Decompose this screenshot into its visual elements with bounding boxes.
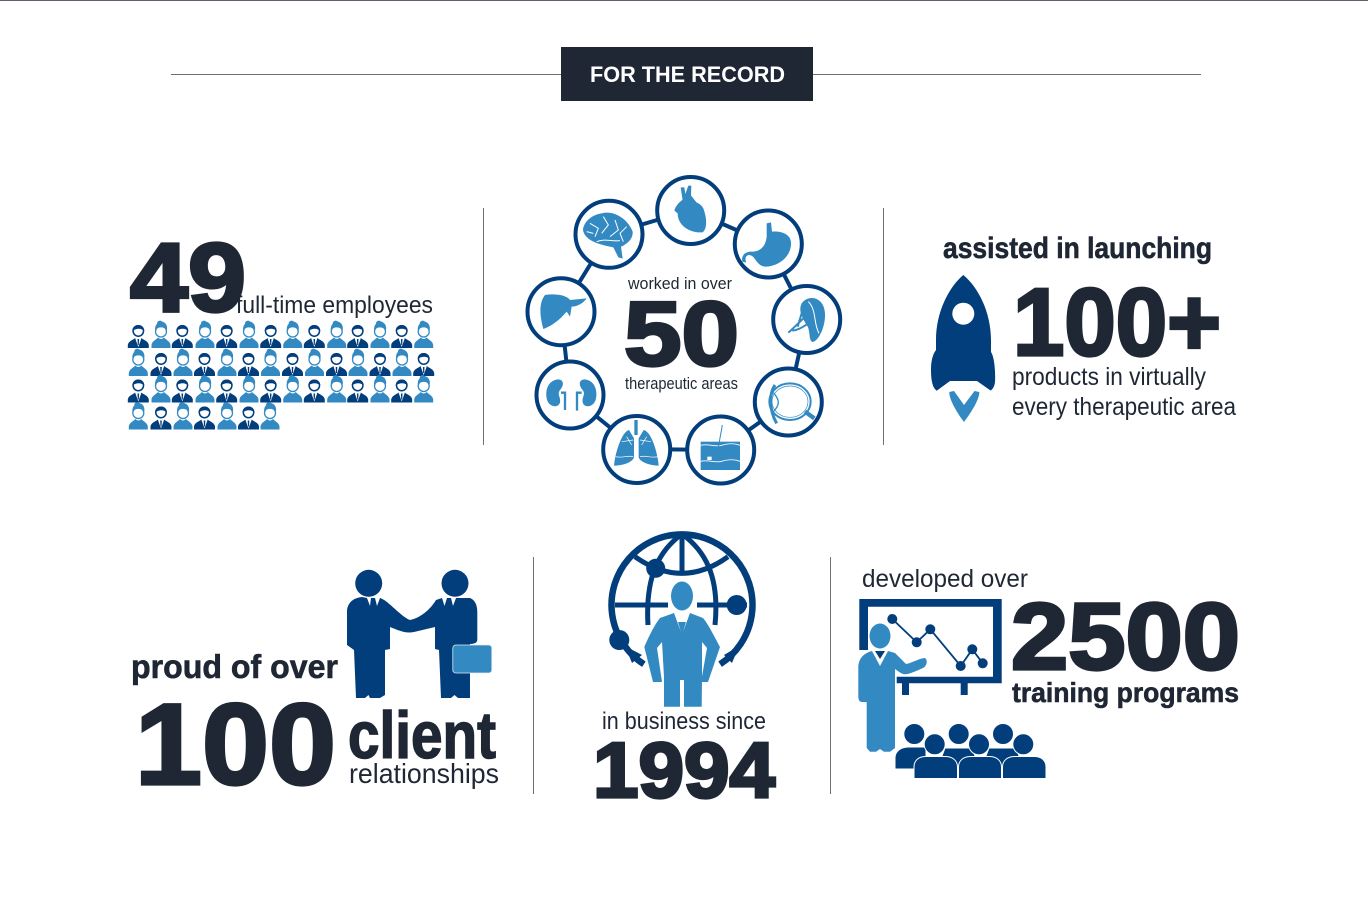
icon: audience bbox=[895, 724, 1046, 778]
label: training programs: training programs bbox=[1012, 677, 1239, 708]
icon: lungs bbox=[614, 420, 659, 466]
icon: presentation board bbox=[859, 599, 1002, 695]
icon: spleen bbox=[788, 298, 825, 342]
panel: client relationships bbox=[131, 570, 499, 809]
panel: employees bbox=[128, 223, 434, 430]
panel: training programs bbox=[858, 565, 1240, 778]
label: assisted in launching: assisted in launching bbox=[943, 232, 1212, 265]
organ circles bbox=[528, 177, 840, 484]
organ icons bbox=[540, 186, 825, 470]
icon: brain bbox=[583, 213, 633, 259]
label: worked in over: worked in over bbox=[627, 274, 732, 293]
number 49: 49 bbox=[130, 223, 246, 332]
icon: liver bbox=[540, 294, 587, 329]
panel: in business since bbox=[593, 534, 775, 814]
icon: globe bbox=[609, 534, 752, 664]
label: client: client bbox=[348, 698, 496, 772]
icon: heart bbox=[674, 186, 706, 232]
title banner: FOR THE RECORD bbox=[590, 62, 785, 87]
title banner bbox=[171, 47, 1201, 101]
label: products in virtually: products in virtually bbox=[1012, 363, 1206, 391]
number 1994: 1994 bbox=[593, 726, 775, 814]
label: developed over: developed over bbox=[862, 565, 1028, 593]
label: therapeutic areas: therapeutic areas bbox=[625, 375, 738, 393]
number 100+: 100+ bbox=[1013, 269, 1221, 376]
number 100: 100 bbox=[135, 681, 336, 809]
label: relationships: relationships bbox=[349, 758, 499, 789]
number 2500: 2500 bbox=[1011, 584, 1240, 690]
label: in business since: in business since bbox=[602, 708, 766, 735]
label: full-time employees: full-time employees bbox=[236, 292, 433, 319]
icon: presenter bbox=[858, 624, 927, 752]
top border line bbox=[0, 0, 1368, 1]
panel: therapeutic areas bbox=[528, 177, 840, 484]
icon: skin bbox=[701, 425, 740, 470]
panel: product launches bbox=[931, 232, 1236, 422]
pictogram: 49 employees bbox=[128, 321, 434, 430]
icon: stomach bbox=[742, 222, 791, 267]
icon: kidneys bbox=[546, 379, 596, 411]
icon: handshake bbox=[347, 570, 492, 698]
label: proud of over: proud of over bbox=[131, 648, 338, 685]
number 50: 50 bbox=[624, 284, 739, 385]
icon: eye bbox=[769, 383, 814, 423]
label: every therapeutic area: every therapeutic area bbox=[1012, 393, 1236, 421]
icon: rocket bbox=[931, 275, 995, 422]
organ ring connectors bbox=[561, 210, 807, 450]
icon: businessman bbox=[644, 582, 720, 707]
